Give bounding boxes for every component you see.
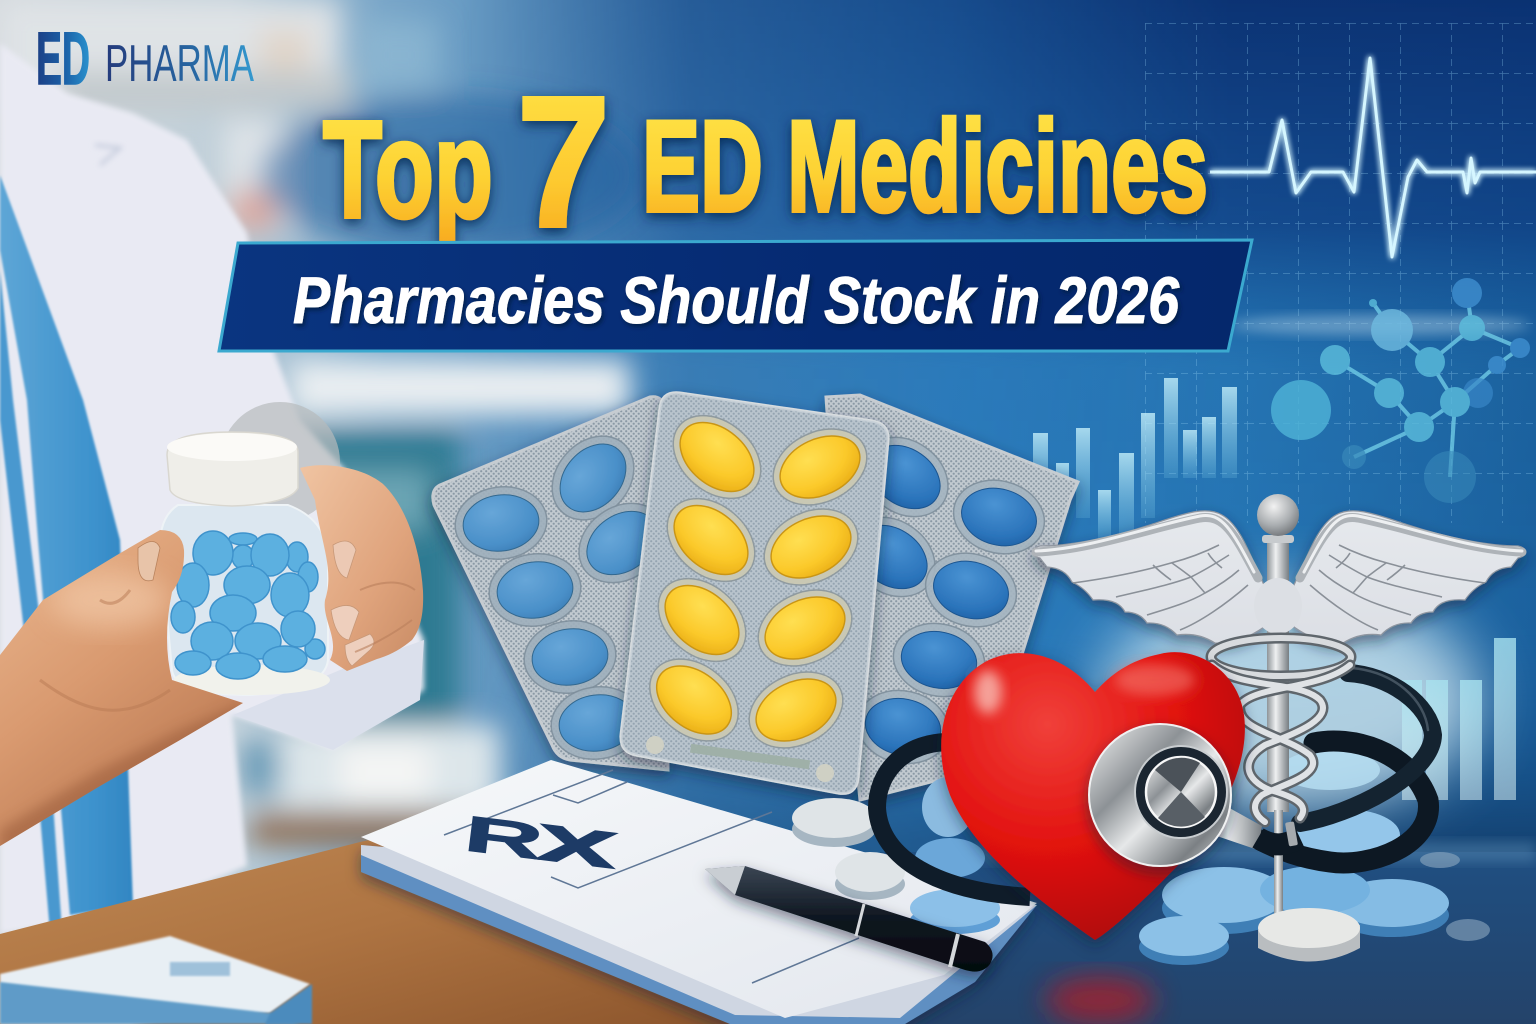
snakes xyxy=(1211,638,1351,822)
blister pack: right blue xyxy=(826,395,1078,800)
subtitle banner xyxy=(219,240,1252,351)
pharmacist white coat xyxy=(0,43,424,934)
ECG heartbeat line xyxy=(1210,58,1536,257)
stethoscope tubing: left loop xyxy=(877,742,1030,897)
wing: left xyxy=(1032,511,1264,643)
bar chart: lower right background bars xyxy=(1402,638,1516,800)
scattered blue tablets xyxy=(1139,750,1449,965)
right tech panel: grid, horizon glow xyxy=(880,23,1536,1024)
subtitle banner: Pharmacies Should Stock in 2026 xyxy=(293,263,1180,337)
pill bottle xyxy=(160,432,330,695)
title: Top 7 ED Medicines xyxy=(323,59,1208,266)
title: Top 7 ED Medicines: 7 xyxy=(517,59,610,266)
bar chart: upper background bars xyxy=(1033,378,1237,540)
staff xyxy=(1267,542,1289,812)
hand holding bottle xyxy=(0,465,423,900)
pills on prescription xyxy=(792,777,1000,934)
title: Top 7 ED Medicines: ED Medicines xyxy=(642,93,1208,239)
wing: right xyxy=(1294,511,1526,643)
prescription pad with Rx xyxy=(361,760,1037,1024)
red heart xyxy=(941,652,1245,940)
blister pack: front yellow xyxy=(621,393,888,793)
wooden counter xyxy=(0,825,730,1024)
logo: ED PHARMA: ED xyxy=(36,17,90,100)
stethoscope tubing: right loops xyxy=(1260,668,1433,863)
pen xyxy=(705,866,993,972)
molecule network xyxy=(1271,278,1530,503)
blister pack: left blue xyxy=(433,397,680,770)
logo: ED PHARMA xyxy=(36,17,254,100)
caduceus emblem xyxy=(1032,494,1526,962)
Rx symbol: Rx xyxy=(460,790,623,883)
medicine box on counter xyxy=(0,936,312,1024)
stethoscope chest piece xyxy=(1089,724,1300,866)
staff base xyxy=(1258,908,1360,962)
title: Top 7 ED Medicines: Top xyxy=(323,93,493,247)
logo: ED PHARMA: PHARMA xyxy=(105,35,254,93)
